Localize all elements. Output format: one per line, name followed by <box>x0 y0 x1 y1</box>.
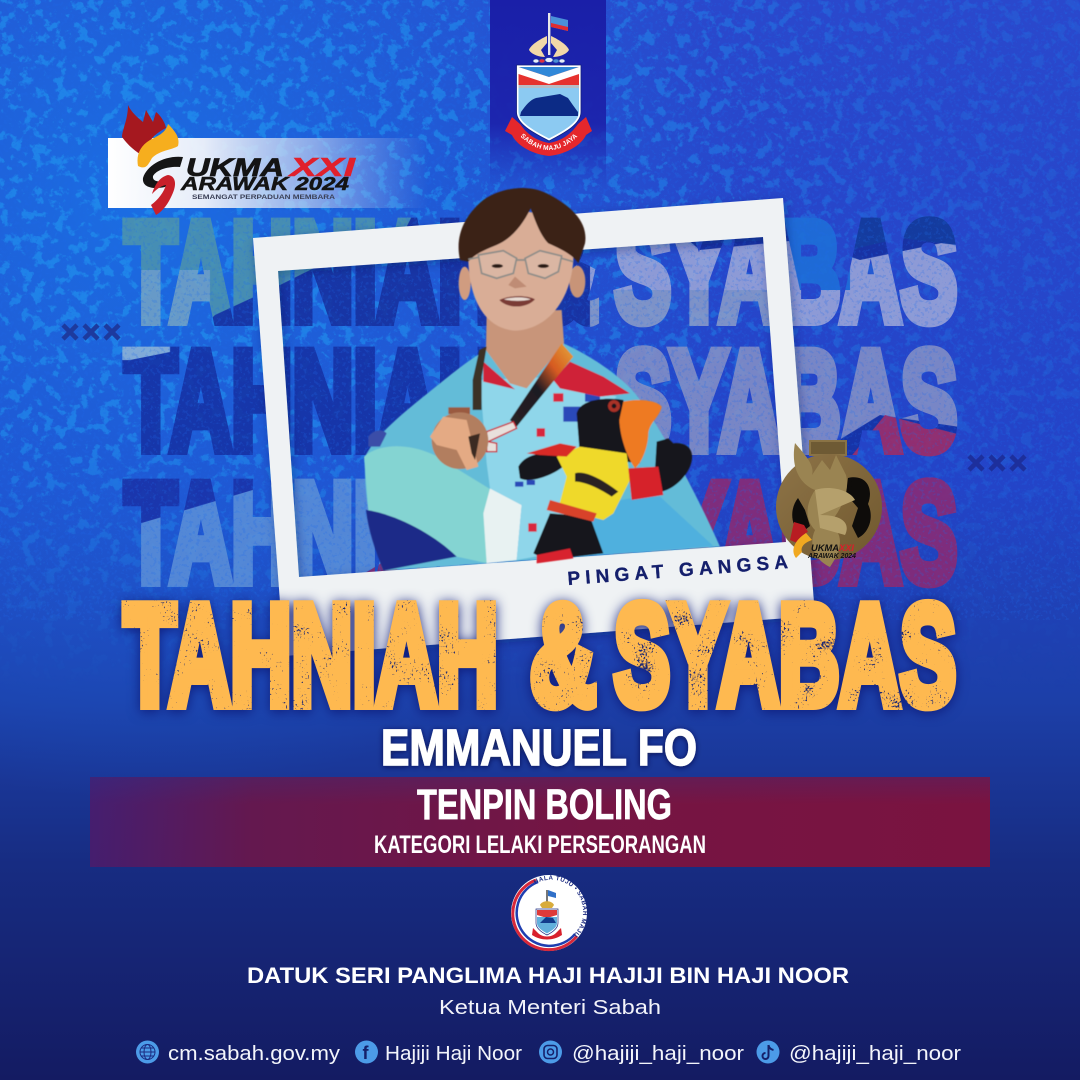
icon: Hala Tuju Sabah Maju Jaya roundel <box>511 875 587 952</box>
athlete name: EMMANUEL FO <box>381 719 697 776</box>
XXI: XXI <box>287 152 356 182</box>
event name: TENPIN BOLING <box>417 781 672 829</box>
lower right flag <box>580 497 713 557</box>
ribbon <box>505 117 592 156</box>
flag pole <box>548 13 550 55</box>
legs <box>533 513 603 560</box>
motto: SABAH MAJU JAYA <box>521 134 578 150</box>
bronze medal icon: ARAWAK 2024 <box>807 553 856 560</box>
ghost row 3: TAHNIAH <box>125 454 499 611</box>
dark patch on cape <box>368 430 387 447</box>
flag cape <box>365 343 720 571</box>
flame <box>122 105 166 158</box>
crest panel <box>490 0 606 190</box>
event band <box>90 777 990 867</box>
beak <box>619 400 662 468</box>
SUKMA logo <box>108 105 428 215</box>
ears <box>459 267 471 300</box>
tiktok handle: @hajiji_haji_noor <box>789 1043 961 1065</box>
icon: tiktok <box>756 1040 780 1064</box>
nose <box>508 277 527 288</box>
ghost row 1: & <box>530 193 598 350</box>
bronze medal icon <box>776 441 882 567</box>
chief minister name: DATUK SERI PANGLIMA HAJI HAJIJI BIN HAJI NOOR <box>247 963 849 988</box>
glasses <box>468 251 573 278</box>
title: TAHNIAH & SYABAS: TAHNIAH <box>124 576 498 735</box>
white flag drape <box>483 488 522 563</box>
torch flame <box>794 443 847 567</box>
lanyard right <box>510 343 573 427</box>
mountain <box>520 94 578 116</box>
jersey pixels <box>515 390 600 487</box>
tribal motif <box>792 477 871 538</box>
ARAWAK 2024: ARAWAK 2024 <box>180 174 349 194</box>
ghost row 2: & <box>530 322 598 479</box>
red swoosh <box>513 880 577 950</box>
ghost row 1: TAHNIAH <box>125 193 499 350</box>
icon: globe <box>136 1040 159 1064</box>
icon: instagram <box>539 1040 562 1064</box>
arms <box>518 451 565 480</box>
blue swoosh <box>517 882 575 946</box>
mouth <box>499 296 535 307</box>
decorative crosses left <box>63 325 119 339</box>
category: KATEGORI LELAKI PERSEORANGAN <box>374 831 706 859</box>
flag <box>551 16 568 31</box>
photo frame <box>253 198 815 656</box>
small sukma mark <box>790 522 808 545</box>
head and body <box>577 399 640 463</box>
caption: PINGAT GANGSA: PINGAT GANGSA <box>567 552 789 590</box>
medal disc <box>776 454 882 560</box>
lanyard left <box>473 347 487 410</box>
logo backing strip <box>108 138 428 208</box>
eye <box>608 400 620 412</box>
face <box>468 212 573 331</box>
jersey <box>480 377 617 560</box>
teal drape <box>364 446 492 563</box>
neck <box>486 310 564 388</box>
decorative crosses right <box>969 456 1025 470</box>
icon: facebook <box>355 1040 378 1064</box>
bronze medal icon: XXI <box>838 543 855 553</box>
bronze medal <box>430 407 488 470</box>
beads <box>533 58 565 63</box>
S red tail <box>151 175 175 215</box>
social links row <box>136 1040 961 1065</box>
chief minister title: Ketua Menteri Sabah <box>439 996 661 1019</box>
roundel motto: HALA TUJU • SABAH MAJU JAYA <box>533 875 587 938</box>
ghost text: repeated TAHNIAH & SYABAS rows <box>125 193 957 611</box>
small crest <box>546 890 548 905</box>
ghost row 3: & <box>530 454 598 611</box>
mascot <box>518 399 692 563</box>
shield <box>516 65 581 141</box>
S black <box>143 157 183 188</box>
icon: facebook: f <box>362 1043 370 1063</box>
website: cm.sabah.gov.my <box>168 1043 340 1065</box>
instagram handle: @hajiji_haji_noor <box>572 1043 744 1065</box>
athlete photo <box>364 188 720 571</box>
shirt <box>557 447 630 520</box>
medal hanger <box>810 441 846 455</box>
shirt logo <box>575 473 618 497</box>
icon: Sabah coat of arms <box>505 13 592 156</box>
bronze medal icon: UKMA <box>811 543 839 553</box>
title: TAHNIAH & SYABAS: & <box>530 576 596 735</box>
torch yellow <box>138 124 179 167</box>
collar <box>483 362 630 397</box>
facebook name: Hajiji Haji Noor <box>385 1043 522 1065</box>
UKMA: UKMA <box>186 154 284 182</box>
tagline: SEMANGAT PERPADUAN MEMBARA <box>192 194 335 201</box>
eyes <box>492 264 503 268</box>
hair <box>459 188 585 263</box>
ghost row 2: TAHNIAH <box>125 322 499 479</box>
hands <box>529 36 569 57</box>
navy flag drape <box>366 510 457 571</box>
